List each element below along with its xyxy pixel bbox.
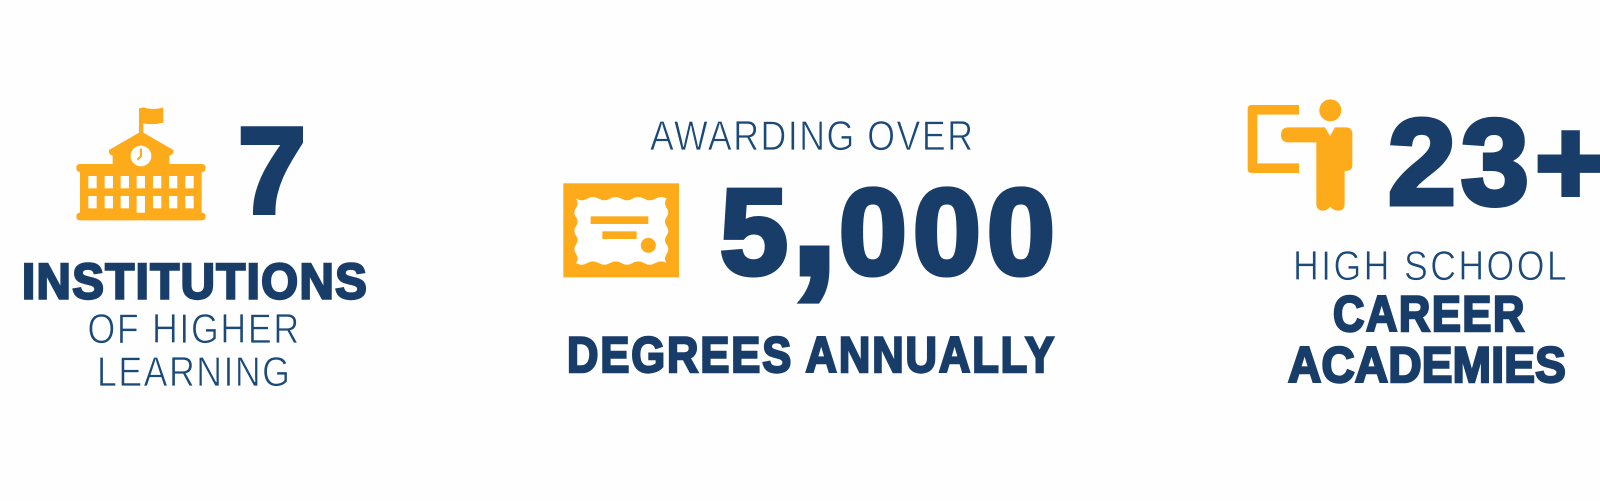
heading: career: CAREER xyxy=(1333,286,1524,342)
panel: degrees annually xyxy=(563,113,1055,383)
icon: teacher at board xyxy=(1248,99,1352,211)
label: awarding over: AWARDING OVER xyxy=(650,113,973,160)
panel: high school career academies xyxy=(1248,94,1600,393)
number: 23+: 2 xyxy=(1388,94,1456,230)
number: 23+: 3 xyxy=(1461,94,1529,230)
number: 7: 7 xyxy=(238,102,306,238)
number: 5,000: 5 xyxy=(720,164,788,300)
icon: school building with flag xyxy=(76,107,206,220)
heading: academies: ACADEMIES xyxy=(1288,338,1566,393)
heading: degrees annually: DEGREES ANNUALLY xyxy=(567,327,1054,383)
icon: diploma certificate xyxy=(563,183,679,277)
label: learning: LEARNING xyxy=(97,349,290,396)
number: 5,000: , xyxy=(790,117,839,312)
panel: institutions of higher learning xyxy=(22,102,367,396)
number: 5,000: 0 xyxy=(913,164,981,300)
heading: institutions: INSTITUTIONS xyxy=(22,254,367,310)
label: high school: HIGH SCHOOL xyxy=(1293,243,1567,290)
number: 5,000: 0 xyxy=(987,164,1055,300)
number: 5,000: 0 xyxy=(839,164,907,300)
label: of higher: OF HIGHER xyxy=(88,306,299,353)
